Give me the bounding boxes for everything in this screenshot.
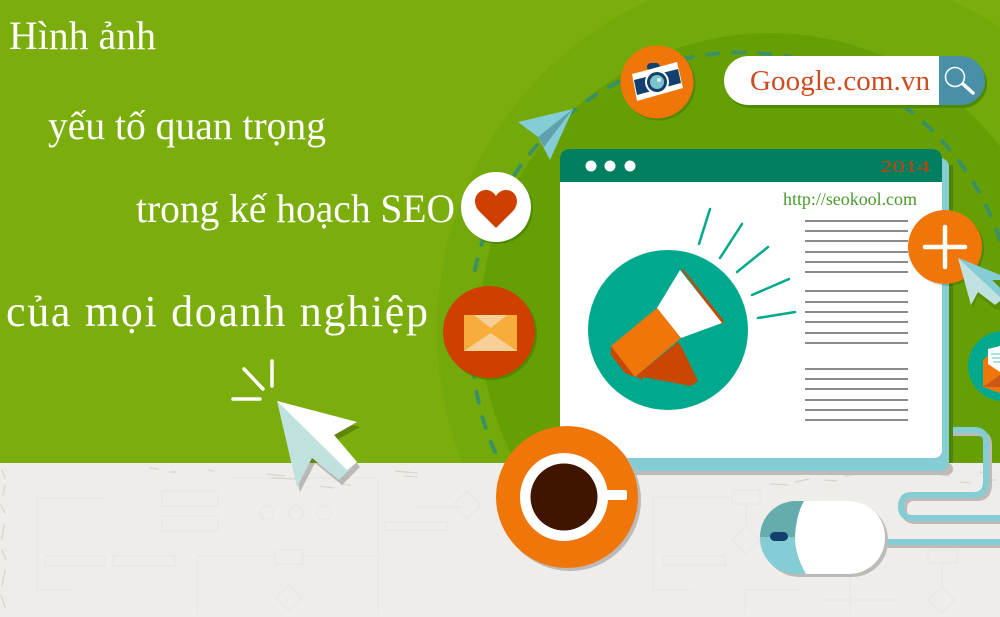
icon: magnifier [946,68,973,93]
megaphone rays [699,209,795,318]
paper background with flowchart pattern [0,463,1000,617]
browser window [560,149,953,475]
computer mouse [760,501,888,577]
icon: megaphone [588,250,748,410]
click sparks [233,361,272,399]
search bar [724,56,987,108]
click cursor [233,361,360,492]
icon: paper plane [518,109,573,160]
title line 2: yếu tố quan trọng [48,103,326,148]
url label: http://seokool.com [783,189,917,209]
article text lines [805,220,908,421]
icon: camera badge [620,46,696,120]
search text: Google.com.vn [750,65,930,97]
title line 3: trong kế hoạch SEO [136,186,455,231]
icon: heart badge [461,172,533,244]
green background [0,0,1000,463]
title [6,13,455,336]
icon: plus badge [908,210,984,286]
icon: envelope badge [443,286,537,380]
window dots [586,160,636,172]
dashed flight path [472,53,1000,452]
icon: coffee cup [496,426,641,571]
icon: mail badge [968,331,1000,401]
year label: 2014 [880,157,931,176]
mouse cables [885,430,1000,545]
window title bar [560,149,942,182]
mouse wheel [770,532,788,541]
title line 4: của mọi doanh nghiệp [6,287,428,336]
title line 1: Hình ảnh [9,13,156,58]
pointer cursor [958,258,1000,310]
